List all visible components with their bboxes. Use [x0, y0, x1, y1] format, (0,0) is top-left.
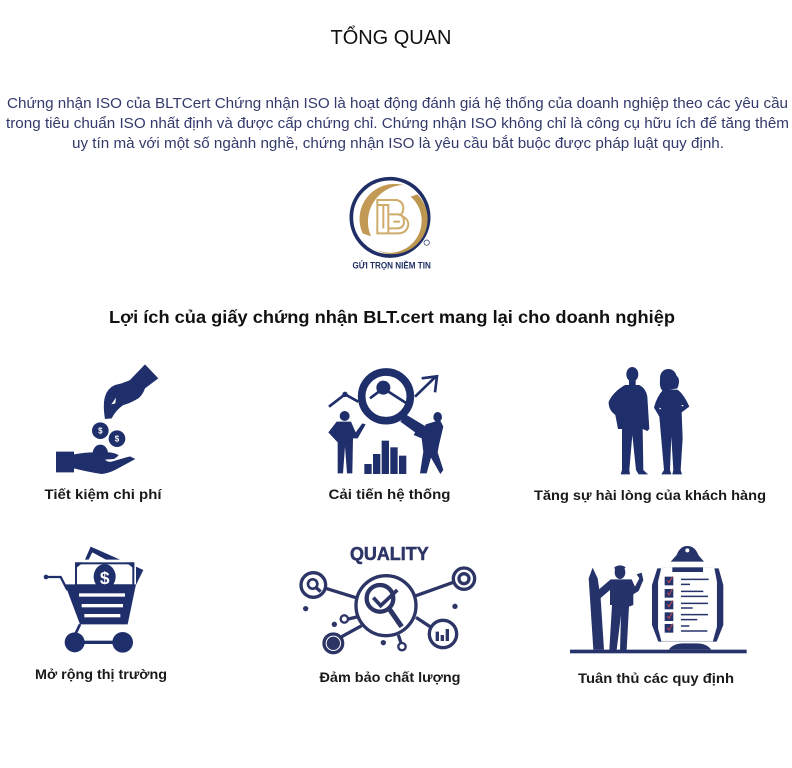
label: Tăng sự hài lòng của khách hàng	[534, 487, 766, 503]
benefit: Mở rộng thị trường	[35, 547, 167, 682]
label: Mở rộng thị trường	[35, 666, 167, 682]
label: Tuân thủ các quy định	[578, 670, 734, 686]
icon: quality network	[301, 543, 475, 653]
icon: person with pencil and checklist	[570, 546, 747, 653]
intro text block	[6, 96, 789, 152]
quality word: QUALITY	[350, 543, 429, 564]
benefit: Cải tiến hệ thống	[328, 372, 450, 502]
logo tagline: GỬI TRỌN NIỀM TIN	[352, 260, 431, 271]
icon: hands and coins: $	[98, 426, 103, 435]
intro text block: Chứng nhận ISO của BLTCert Chứng nhận ISO là hoạt động đánh giá hệ thống của doanh nghiệp theo các yêu cầu	[7, 96, 788, 112]
icon: shopping cart with money: $	[100, 568, 110, 588]
benefit: Tuân thủ các quy định	[570, 546, 747, 686]
icon: two people	[609, 367, 689, 474]
label: Tiết kiệm chi phí	[44, 486, 163, 502]
icon: magnifier, chart and people	[328, 372, 443, 474]
intro text block: trong tiêu chuẩn ISO nhất định và được cấp chứng chỉ. Chứng nhận ISO không chỉ là công cụ hữu ích để tăng thêm	[6, 116, 789, 132]
logo	[351, 179, 431, 271]
icon: hands and coins	[56, 364, 158, 474]
title: TỔNG QUAN	[330, 25, 452, 49]
section heading: Lợi ích của giấy chứng nhận BLT.cert mang lại cho doanh nghiệp	[109, 307, 675, 327]
benefit: Đảm bảo chất lượng	[301, 543, 475, 685]
label: Đảm bảo chất lượng	[320, 669, 460, 685]
icon: hands and coins: $	[115, 434, 120, 443]
benefit: Tiết kiệm chi phí	[44, 364, 163, 502]
benefit: Tăng sự hài lòng của khách hàng	[534, 367, 766, 503]
intro text block: uy tín mà với một số ngành nghề, chứng nhận ISO là yêu cầu bắt buộc được pháp luật quy định.	[72, 135, 724, 152]
label: Cải tiến hệ thống	[328, 486, 450, 502]
